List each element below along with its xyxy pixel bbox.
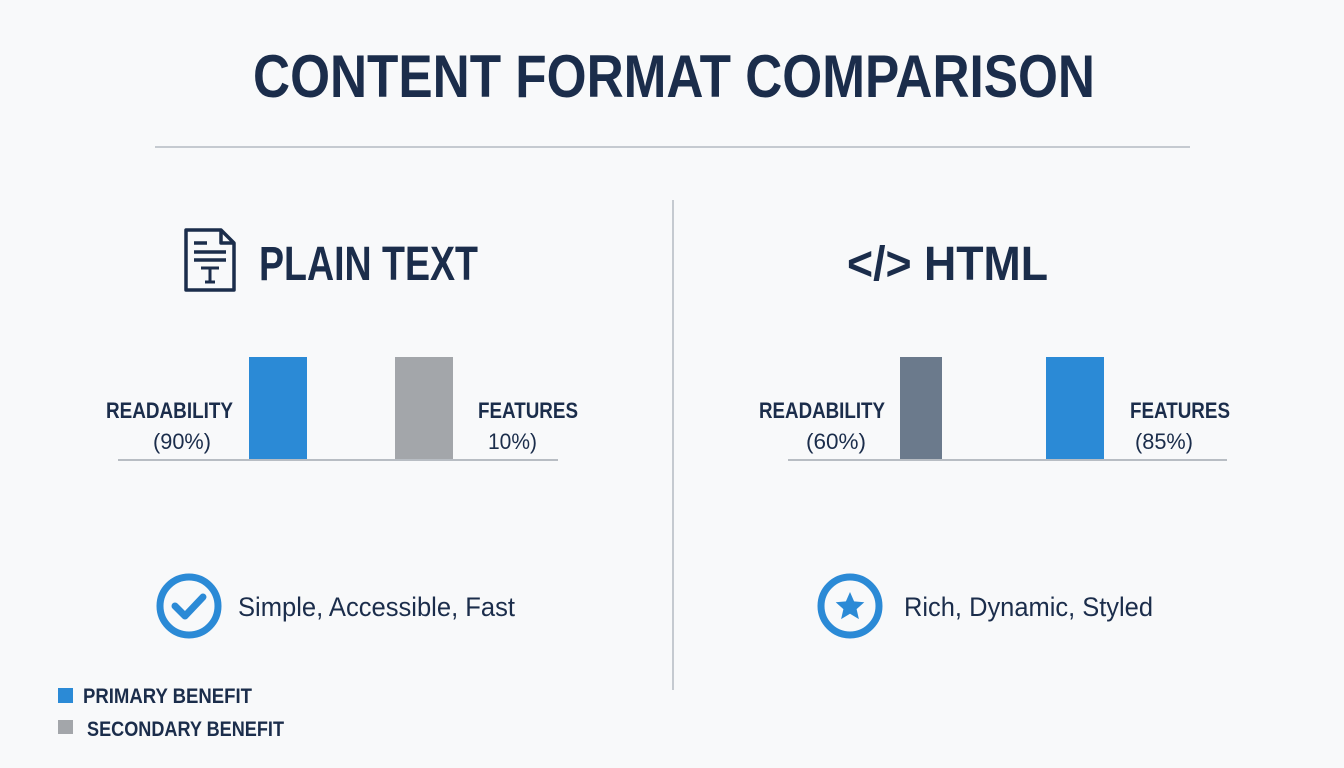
icon: check circle: [160, 577, 218, 635]
panel: html: [759, 238, 1230, 635]
bar chart: plain text: (90%): [153, 429, 211, 454]
panel: plain text: [106, 230, 578, 635]
legend: SECONDARY BENEFIT: [87, 718, 284, 741]
bar chart: plain text: READABILITY: [106, 398, 233, 423]
bar chart: plain text: [106, 357, 578, 460]
heading: html: </> HTML: [847, 238, 1048, 291]
heading: plain text: PLAIN TEXT: [259, 238, 478, 291]
bar chart: html: READABILITY: [759, 398, 885, 423]
icon: star circle: [821, 577, 879, 635]
bar chart: html: FEATURES: [1130, 398, 1230, 423]
bar chart: html: [759, 357, 1230, 460]
bar chart: html: (85%): [1135, 429, 1193, 454]
title: CONTENT FORMAT COMPARISON: [253, 43, 1095, 110]
bar chart: html: (60%): [806, 429, 866, 454]
bar chart: plain text: FEATURES: [478, 398, 578, 423]
legend: [58, 685, 284, 741]
icon: document: [186, 230, 234, 290]
text: plain text benefits: Simple, Accessible, Fast: [238, 592, 515, 622]
text: html benefits: Rich, Dynamic, Styled: [904, 592, 1153, 622]
bar chart: plain text: 10%): [488, 429, 537, 454]
legend: PRIMARY BENEFIT: [83, 685, 252, 708]
